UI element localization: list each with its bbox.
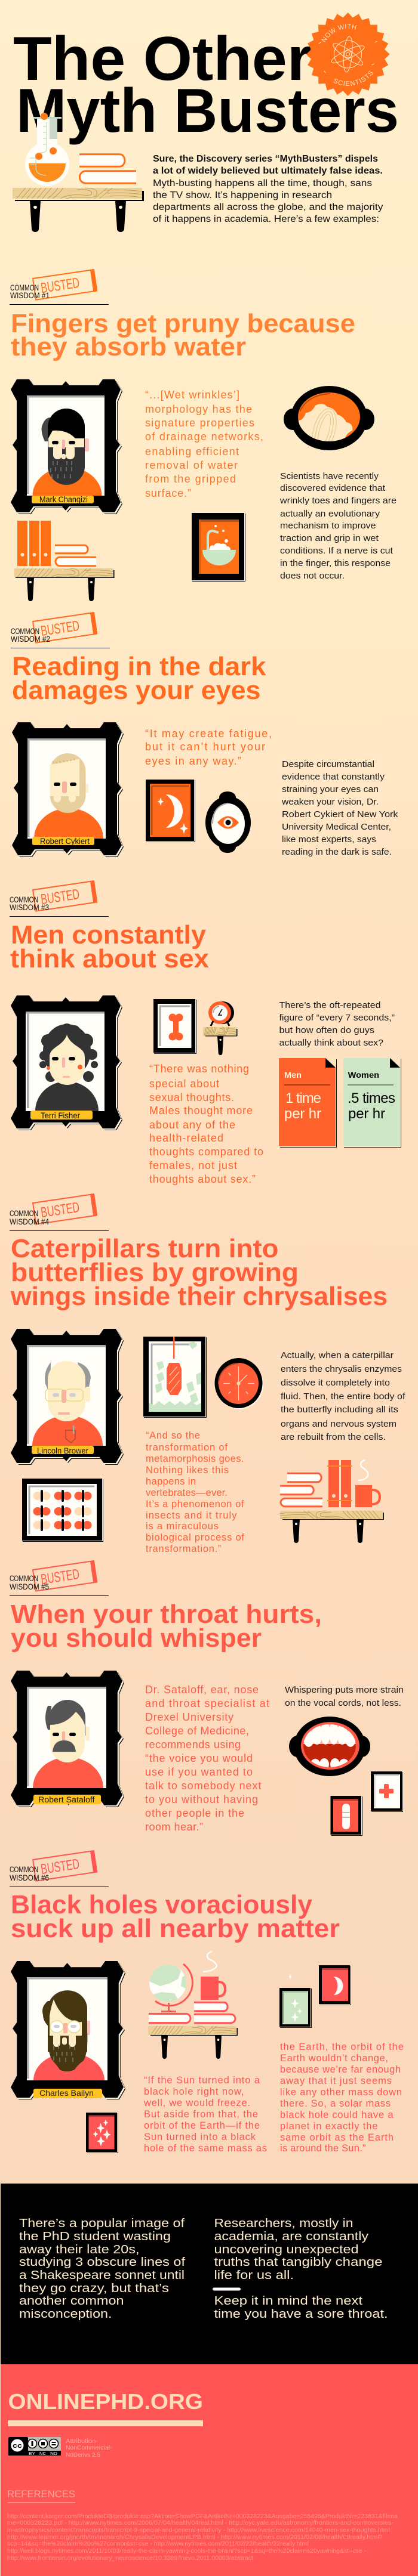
label: common wisdom bbox=[10, 283, 109, 305]
stamp: busted: BUSTED bbox=[40, 1856, 81, 1878]
body text: actually think about sex? bbox=[279, 1038, 383, 1048]
heading: you should whisper bbox=[11, 1623, 262, 1653]
quote: use if you wanted to bbox=[145, 1766, 253, 1778]
text: left column: they go crazy, but that’s bbox=[19, 2282, 169, 2295]
title: The Other bbox=[13, 24, 312, 94]
text: left column bbox=[19, 2217, 186, 2321]
text: references: http://www.frontiersin.org/evolutionary_neuroscience/10.3389/fnevo.2011.00003/abstract bbox=[7, 2555, 253, 2562]
panel: common wisdom 3 bbox=[10, 881, 401, 1185]
body text: There’s the oft-repeated bbox=[279, 1000, 381, 1010]
intro text: the TV show. It’s happening in research bbox=[153, 190, 332, 200]
picture: butterflies bbox=[22, 1479, 103, 1542]
icon: creative commons badge: ND bbox=[50, 2451, 58, 2456]
heading: Fingers get pruny because bbox=[11, 309, 355, 338]
quote: right column bbox=[280, 2042, 404, 2154]
heading: they absorb water bbox=[11, 332, 246, 361]
portrait: Robert Sataloff: Robert Sataloff bbox=[38, 1795, 95, 1804]
quote bbox=[145, 728, 272, 767]
body text: organs and nervous system bbox=[281, 1419, 397, 1429]
logo: onlinephd.org: ONLINEPHD.ORG bbox=[8, 2389, 203, 2414]
quote: left column: But aside from that, the bbox=[144, 2109, 258, 2120]
icon: wall clock bbox=[215, 1358, 263, 1409]
body text: are rebuilt from the cells. bbox=[281, 1432, 386, 1442]
text: references: http://content.karger.com/ProdukteDB/produkte.asp?Aktion=ShowPDF&ArtikelNr=000328223&Ausgabe=255495&ProduktNr=223831&filena bbox=[7, 2513, 398, 2520]
portrait: Charles Bailyn bbox=[11, 1961, 125, 2099]
quote: left column bbox=[143, 2075, 267, 2154]
text: license bbox=[66, 2438, 112, 2459]
body text: fluid. Then, the entire body of bbox=[281, 1391, 405, 1402]
badge: now with scientists bbox=[306, 13, 389, 96]
picture: bathtub bbox=[192, 513, 245, 582]
quote: “And so the bbox=[146, 1430, 200, 1441]
quote: transformation of bbox=[146, 1442, 228, 1453]
stamp: busted bbox=[33, 270, 97, 300]
title bbox=[13, 24, 399, 146]
text: license: NonCommercial- bbox=[66, 2445, 112, 2451]
body text bbox=[279, 471, 397, 581]
text: left column: misconception. bbox=[19, 2308, 112, 2321]
icon: small star bbox=[288, 1974, 292, 1980]
text: references bbox=[7, 2513, 398, 2562]
body text bbox=[281, 1350, 405, 1442]
quote: surface.” bbox=[145, 487, 191, 499]
text: references: me=000328223.pdf - http://www.nytimes.com/2006/07/04/health/04real.html - http://oyc.yale.edu/astronomy/frontiers-and-controversies- bbox=[7, 2520, 394, 2526]
label: common wisdom: WISDOM #1 bbox=[10, 291, 50, 300]
text: right column: life for us all. bbox=[214, 2269, 294, 2282]
quote: happens in bbox=[146, 1476, 196, 1487]
label: common wisdom: COMMON bbox=[10, 895, 38, 904]
body text: wrinkly toes and fingers are bbox=[279, 496, 397, 506]
text: left column: There’s a popular image of bbox=[19, 2217, 185, 2230]
body text: Scientists have recently bbox=[280, 471, 379, 481]
portrait: Charles Bailyn: Charles Bailyn bbox=[39, 2089, 94, 2098]
quote: left column: well, we would freeze. bbox=[143, 2098, 250, 2108]
illustration: binders and books on shelf bbox=[14, 521, 115, 601]
quote: sexual thoughts. bbox=[149, 1091, 234, 1103]
stamp: busted bbox=[33, 613, 97, 643]
picture: bone bbox=[153, 999, 196, 1054]
panel: footer bbox=[1, 2364, 418, 2576]
card: men: per hr bbox=[284, 1106, 321, 1122]
quote: left column: hole of the same mass as bbox=[144, 2143, 267, 2154]
stamp: busted bbox=[33, 1194, 97, 1224]
body text bbox=[281, 759, 398, 857]
label: common wisdom: COMMON bbox=[11, 627, 39, 636]
quote: from the gripped bbox=[145, 473, 236, 485]
quote: Nothing likes this bbox=[146, 1465, 229, 1476]
intro text: a lot of widely believed but ultimately false ideas. bbox=[153, 166, 383, 176]
panel: common wisdom 1 bbox=[10, 270, 397, 601]
quote: left column: “If the Sun turned into a bbox=[144, 2075, 260, 2086]
stamp: busted bbox=[33, 1851, 97, 1881]
stamp: busted: BUSTED bbox=[40, 1566, 81, 1588]
picture: moon bbox=[146, 780, 195, 842]
quote: left column: Sun turned into a black bbox=[144, 2132, 256, 2142]
heading bbox=[11, 309, 355, 361]
text: left column: away their late 20s, bbox=[19, 2243, 140, 2256]
portrait: Mark Changizi: Mark Changizi bbox=[39, 495, 88, 504]
panel: common wisdom 5 bbox=[10, 1561, 404, 1836]
intro text: departments all across the globe, and the majority bbox=[153, 202, 383, 212]
heading bbox=[12, 652, 266, 705]
label: common wisdom: WISDOM #4 bbox=[10, 1217, 49, 1226]
label: common wisdom: WISDOM #3 bbox=[10, 903, 49, 912]
icon: creative commons badge: BY bbox=[29, 2451, 35, 2456]
body text: Robert Cykiert of New York bbox=[282, 809, 398, 820]
portrait: Terri Fisher: Terri Fisher bbox=[41, 1111, 80, 1120]
quote: insects and it truly bbox=[146, 1510, 237, 1521]
illustration: globe, books and mug on shelf bbox=[148, 1952, 238, 2059]
text: license: NoDerivs 2.5 bbox=[66, 2452, 100, 2459]
body text: figure of “every 7 seconds,” bbox=[279, 1013, 395, 1023]
picture: bandage bbox=[331, 1796, 362, 1836]
quote: vertebrates—ever. bbox=[146, 1488, 228, 1498]
quote: right column: planet in exactly the bbox=[280, 2121, 377, 2132]
quote: left column: orbit of the Earth—if the bbox=[144, 2120, 260, 2131]
illustration: flask and books on a shelf bbox=[13, 113, 144, 232]
quote: “It may create fatigue, bbox=[145, 728, 272, 740]
quote bbox=[145, 1684, 269, 1833]
label: common wisdom: WISDOM #5 bbox=[10, 1582, 49, 1591]
quote: other people in the bbox=[145, 1807, 244, 1819]
body text: but how often do guys bbox=[279, 1025, 374, 1035]
quote: “the voice you would bbox=[145, 1752, 253, 1764]
body text: actually an evolutionary bbox=[280, 509, 380, 519]
quote: talk to somebody next bbox=[145, 1780, 262, 1792]
text: left column: studying 3 obscure lines of bbox=[19, 2256, 186, 2269]
heading: wings inside their chrysalises bbox=[10, 1282, 388, 1311]
label: common wisdom bbox=[10, 1209, 109, 1231]
heading bbox=[10, 1234, 388, 1311]
quote: right column: the Earth, the orbit of the bbox=[280, 2042, 404, 2052]
quote: health-related bbox=[149, 1132, 223, 1144]
quote: right column: is around the Sun.” bbox=[280, 2143, 365, 2154]
portrait: Robert Cykiert: Robert Cykiert bbox=[40, 837, 90, 846]
quote: Dr. Sataloff, ear, nose bbox=[145, 1684, 259, 1696]
quote: but it can’t hurt your bbox=[145, 741, 265, 753]
quote: right column: there. So, a solar mass bbox=[280, 2098, 391, 2109]
quote: right column: same orbit as the Earth bbox=[280, 2132, 394, 2143]
body text: conditions. If a nerve is cut bbox=[280, 546, 394, 556]
heading: think about sex bbox=[10, 944, 210, 973]
text: left column: the PhD student wasting bbox=[19, 2230, 171, 2243]
icon: creative commons badge bbox=[8, 2437, 61, 2456]
quote: about any of the bbox=[149, 1119, 235, 1131]
body text: enters the chrysalis enzymes bbox=[281, 1364, 402, 1374]
title: Myth Busters bbox=[16, 76, 399, 146]
stamp: busted: BUSTED bbox=[40, 1199, 81, 1221]
body text: on the vocal cords, not less. bbox=[285, 1698, 401, 1708]
quote: to you without having bbox=[145, 1793, 258, 1805]
quote: It’s a phenomenon of bbox=[146, 1499, 244, 1510]
stamp: busted: BUSTED bbox=[40, 275, 81, 296]
panel: common wisdom 2 bbox=[11, 613, 398, 857]
picture: green stars bbox=[279, 1988, 312, 2028]
badge: now with scientists: SCIENTISTS bbox=[333, 70, 373, 86]
icon: fingerprint medallion bbox=[284, 386, 374, 455]
quote: recommends using bbox=[145, 1739, 241, 1751]
intro text: Sure, the Discovery series “MythBusters” dispels bbox=[153, 154, 378, 164]
quote: signature properties bbox=[145, 417, 254, 429]
text: right column: Keep it in mind the next bbox=[214, 2294, 363, 2308]
body text bbox=[279, 1000, 395, 1048]
quote: thoughts about sex.” bbox=[149, 1173, 256, 1185]
quote: morphology has the bbox=[145, 403, 252, 415]
text: right column: truths that tangibly change bbox=[214, 2256, 382, 2269]
label: common wisdom: WISDOM #2 bbox=[11, 635, 50, 644]
heading bbox=[11, 1600, 322, 1653]
heading: butterflies by growing bbox=[11, 1258, 299, 1287]
body text bbox=[285, 1685, 404, 1708]
heading: When your throat hurts, bbox=[11, 1600, 322, 1629]
quote: metamorphosis goes. bbox=[146, 1454, 244, 1464]
quote: enabling efficient bbox=[145, 446, 239, 457]
text: right column: uncovering unexpected bbox=[214, 2243, 358, 2256]
stamp: busted: BUSTED bbox=[40, 886, 81, 908]
portrait: Robert Sataloff bbox=[11, 1671, 124, 1807]
card: women: Women bbox=[348, 1070, 379, 1080]
heading: Caterpillars turn into bbox=[11, 1234, 278, 1263]
intro text: Myth-busting happens all the time, though, sans bbox=[153, 178, 372, 188]
quote: right column: like any other mass down bbox=[280, 2087, 402, 2098]
panel: common wisdom 4 bbox=[10, 1194, 405, 1554]
label: common wisdom bbox=[10, 1865, 109, 1887]
card: women: .5 times bbox=[348, 1090, 395, 1106]
picture: medical cross bbox=[371, 1771, 403, 1812]
text: references: in-astrophysics/content/transcripts/transcript-9-special-and-general-relativity - http://www.livescience.com/14040-men-sex-thoughts.html bbox=[7, 2527, 390, 2534]
quote bbox=[149, 1063, 263, 1185]
icon: open mouth bbox=[289, 1717, 370, 1776]
text: right column: Researchers, mostly in bbox=[214, 2217, 354, 2230]
quote: is a miraculous bbox=[146, 1521, 219, 1532]
illustration: books, binders and mug on shelf bbox=[280, 1460, 384, 1543]
portrait: Lincoln Brower: Lincoln Brower bbox=[37, 1446, 88, 1455]
quote: of drainage networks, bbox=[145, 431, 263, 443]
quote: left column: black hole right now, bbox=[144, 2086, 244, 2097]
panel: conclusion bbox=[1, 2184, 418, 2364]
quote bbox=[146, 1430, 244, 1554]
body text: does not occur. bbox=[280, 571, 345, 581]
portrait: Mark Changizi bbox=[11, 379, 122, 514]
label: common wisdom bbox=[10, 895, 109, 917]
body text: discovered evidence that bbox=[280, 483, 386, 493]
quote: biological process of bbox=[146, 1532, 244, 1543]
quote: “There was nothing bbox=[149, 1063, 249, 1075]
text: right column: time you have a sore throat. bbox=[214, 2308, 388, 2321]
picture: red stars bbox=[86, 2113, 118, 2153]
intro text: of it happens in academia. Here’s a few examples: bbox=[153, 214, 379, 224]
body text: evidence that constantly bbox=[282, 772, 385, 782]
body text: Actually, when a caterpillar bbox=[281, 1350, 394, 1360]
body text: like most experts, says bbox=[282, 834, 376, 845]
body text: straining your eyes can bbox=[282, 784, 379, 794]
heading: Reading in the dark bbox=[12, 652, 266, 681]
icon: creative commons badge: NC bbox=[39, 2451, 47, 2456]
body text: traction and grip in wet bbox=[280, 533, 379, 543]
card: men: Men bbox=[284, 1070, 302, 1080]
portrait: Lincoln Brower bbox=[11, 1329, 124, 1465]
body text: dissolve it completely into bbox=[281, 1378, 390, 1388]
quote: Males thought more bbox=[149, 1105, 253, 1117]
heading bbox=[10, 920, 210, 973]
text: right column bbox=[213, 2217, 388, 2321]
label: common wisdom bbox=[10, 1574, 109, 1596]
body text: weaken your vision, Dr. bbox=[281, 797, 379, 807]
body text: Whispering puts more strain bbox=[285, 1685, 404, 1695]
body text: mechanism to improve bbox=[280, 521, 376, 531]
stamp: busted bbox=[33, 1561, 97, 1591]
stamp: busted bbox=[33, 881, 97, 911]
quote: right column: away that it just seems bbox=[280, 2076, 392, 2086]
heading: Men constantly bbox=[11, 920, 207, 950]
quote: right column: black hole could have a bbox=[280, 2110, 394, 2120]
heading: damages your eyes bbox=[12, 676, 260, 705]
quote: removal of water bbox=[145, 459, 238, 471]
quote: right column: Earth wouldn’t change, bbox=[280, 2053, 388, 2064]
heading: Black holes voraciously bbox=[11, 1890, 313, 1919]
label: common wisdom: COMMON bbox=[10, 1865, 38, 1874]
intro text bbox=[153, 154, 383, 224]
stamp: busted: BUSTED bbox=[40, 618, 81, 639]
text: references: http://www.learner.org/jnorth/tm/monarch/ChrysalisDevelopmentLPB.html - http://www.nytimes.com/2011/02/08/health/08really.html? bbox=[7, 2534, 383, 2541]
text: right column: academia, are constantly bbox=[214, 2230, 368, 2243]
body text: reading in the dark is safe. bbox=[282, 847, 392, 857]
quote bbox=[145, 389, 263, 499]
quote: females, not just bbox=[149, 1159, 237, 1171]
text: references: scp=14&sq=the%20claim%20o%27connor&st=cse - http://www.nytimes.com/2011/02/22/health/22really.html bbox=[7, 2541, 308, 2547]
heading: references: REFERENCES bbox=[7, 2488, 75, 2500]
quote: “...[Wet wrinkles’] bbox=[145, 389, 239, 401]
badge: now with scientists: NOW WITH bbox=[321, 24, 356, 42]
text: left column: a Shakespeare sonnet until bbox=[19, 2269, 185, 2282]
quote: eyes in any way.” bbox=[145, 755, 241, 767]
quote: special about bbox=[149, 1078, 219, 1090]
quote: thoughts compared to bbox=[149, 1146, 263, 1158]
label: common wisdom: COMMON bbox=[10, 283, 39, 292]
quote: and throat specialist at bbox=[145, 1697, 269, 1709]
picture: chrysalis bbox=[143, 1337, 207, 1418]
text: references: http://well.blogs.nytimes.com/2011/10/03/really-the-claim-yawning-cools-the-brain/?scp=1&sq=the%20claim%20yawning&st=cse - bbox=[7, 2548, 366, 2555]
text: license: Attribution- bbox=[66, 2438, 98, 2445]
icon: eye oval bbox=[205, 791, 251, 853]
heading: suck up all nearby matter bbox=[11, 1914, 340, 1943]
icon: creative commons badge: cc bbox=[13, 2442, 22, 2450]
card: men: 1 time bbox=[285, 1090, 321, 1106]
card: men bbox=[279, 1058, 337, 1148]
body text: University Medical Center, bbox=[282, 822, 391, 832]
label: common wisdom: WISDOM #6 bbox=[10, 1873, 49, 1882]
panel: common wisdom 6 bbox=[10, 1851, 404, 2154]
card: women bbox=[343, 1058, 401, 1148]
body text: Despite circumstantial bbox=[282, 759, 374, 769]
body text: in the finger, this response bbox=[280, 558, 391, 568]
quote: College of Medicine, bbox=[145, 1725, 249, 1737]
label: common wisdom: COMMON bbox=[10, 1574, 38, 1583]
card: women: per hr bbox=[348, 1106, 385, 1122]
portrait: Terri Fisher bbox=[11, 995, 122, 1130]
quote: room hear.” bbox=[145, 1821, 203, 1833]
heading bbox=[11, 1890, 340, 1943]
icon: alarm clock on shelf bbox=[203, 1001, 238, 1055]
portrait: Robert Cykiert bbox=[12, 722, 124, 857]
quote: transformation.” bbox=[146, 1544, 221, 1554]
body text: the butterfly including all its bbox=[281, 1405, 398, 1415]
label: common wisdom bbox=[11, 627, 110, 648]
logo: onlinephd.org bbox=[8, 2389, 203, 2426]
quote: Drexel University bbox=[145, 1711, 233, 1723]
quote: right column: because we’re far enough bbox=[280, 2064, 401, 2075]
picture: crescent moon bbox=[319, 1965, 351, 2005]
label: common wisdom: COMMON bbox=[10, 1209, 38, 1218]
text: left column: another common bbox=[19, 2294, 124, 2308]
